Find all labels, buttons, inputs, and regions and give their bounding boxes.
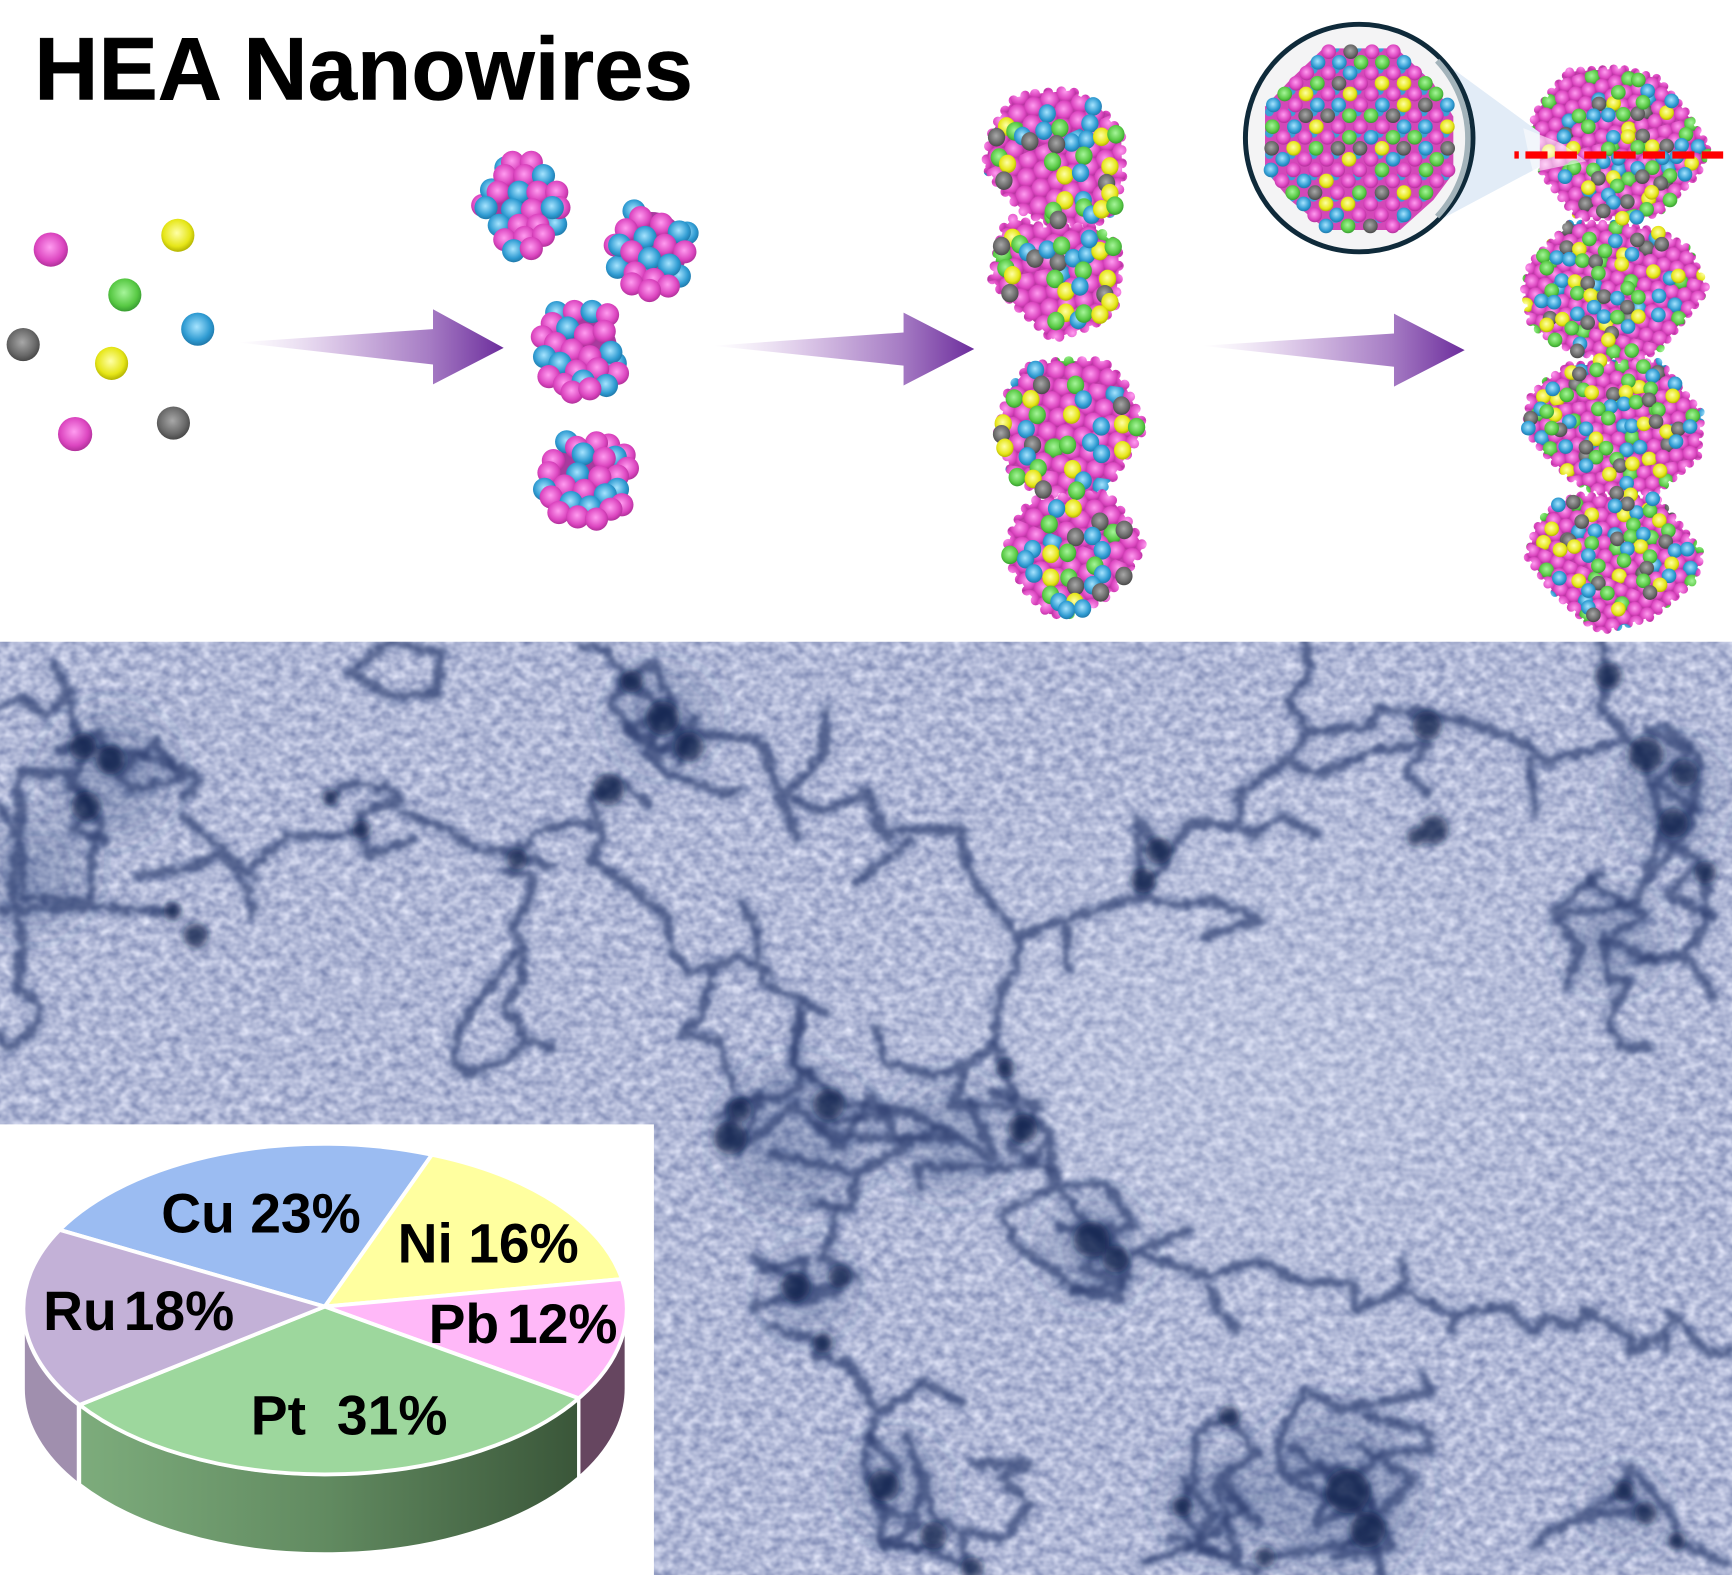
coloured atoms on lower segments xyxy=(1521,226,1700,622)
diffuse haze around aggregates xyxy=(0,672,1718,1574)
lobe one xyxy=(985,91,1122,225)
cluster one xyxy=(471,151,571,262)
cross-section lattice xyxy=(1264,44,1455,233)
slice: Pt xyxy=(80,1307,579,1474)
arrow: clusters to fragments xyxy=(712,313,974,385)
slice: Ni xyxy=(325,1155,622,1307)
label: Pt: 31% xyxy=(337,1385,447,1447)
panel: composition pie chart xyxy=(0,1124,654,1575)
label: Pb: 12% xyxy=(507,1293,618,1355)
label: Ru: 18% xyxy=(124,1280,234,1342)
coloured atoms on top segment xyxy=(1557,73,1699,226)
lobe three xyxy=(997,361,1144,495)
label: Ni: Ni 16% xyxy=(398,1212,579,1274)
label: Ru: Ru xyxy=(43,1280,117,1342)
label: Pt: Pt xyxy=(251,1385,306,1447)
wire segment top xyxy=(1529,68,1708,218)
slice: Ru xyxy=(23,1230,325,1405)
pie top slices xyxy=(23,1144,627,1474)
wire segment four xyxy=(1528,496,1701,631)
title: HEA Nanowires xyxy=(34,19,693,118)
panel: nanowire fragments xyxy=(985,91,1145,619)
cluster three xyxy=(531,300,629,404)
lens highlight xyxy=(1523,128,1586,172)
panel: free atoms xyxy=(7,219,214,451)
red dashed section line xyxy=(1514,152,1723,158)
slice: Cu xyxy=(60,1144,432,1307)
panel: small clusters xyxy=(471,151,699,531)
lobe four xyxy=(1005,494,1143,614)
cluster two xyxy=(604,199,699,302)
magnifier inset xyxy=(1245,24,1473,252)
panel: electron microscope image xyxy=(0,639,1732,1575)
label: Cu: Cu 23% xyxy=(161,1183,361,1245)
wire segment three xyxy=(1525,362,1701,491)
panel: full nanowire xyxy=(1521,68,1708,631)
pie side walls xyxy=(23,1309,626,1554)
arrow: fragments to nanowire xyxy=(1202,314,1465,387)
wire segment two xyxy=(1524,224,1707,361)
lobe two xyxy=(992,219,1119,339)
cluster four xyxy=(533,430,639,531)
magnifier cone xyxy=(1436,56,1540,220)
nanowire network xyxy=(0,639,1732,1575)
coloured atoms on fragments xyxy=(988,97,1145,619)
dark nanowire aggregates xyxy=(70,663,1717,1575)
arrow: atoms to clusters xyxy=(237,309,504,384)
slice: Pb xyxy=(325,1279,627,1398)
label: Pb: Pb xyxy=(429,1293,499,1355)
